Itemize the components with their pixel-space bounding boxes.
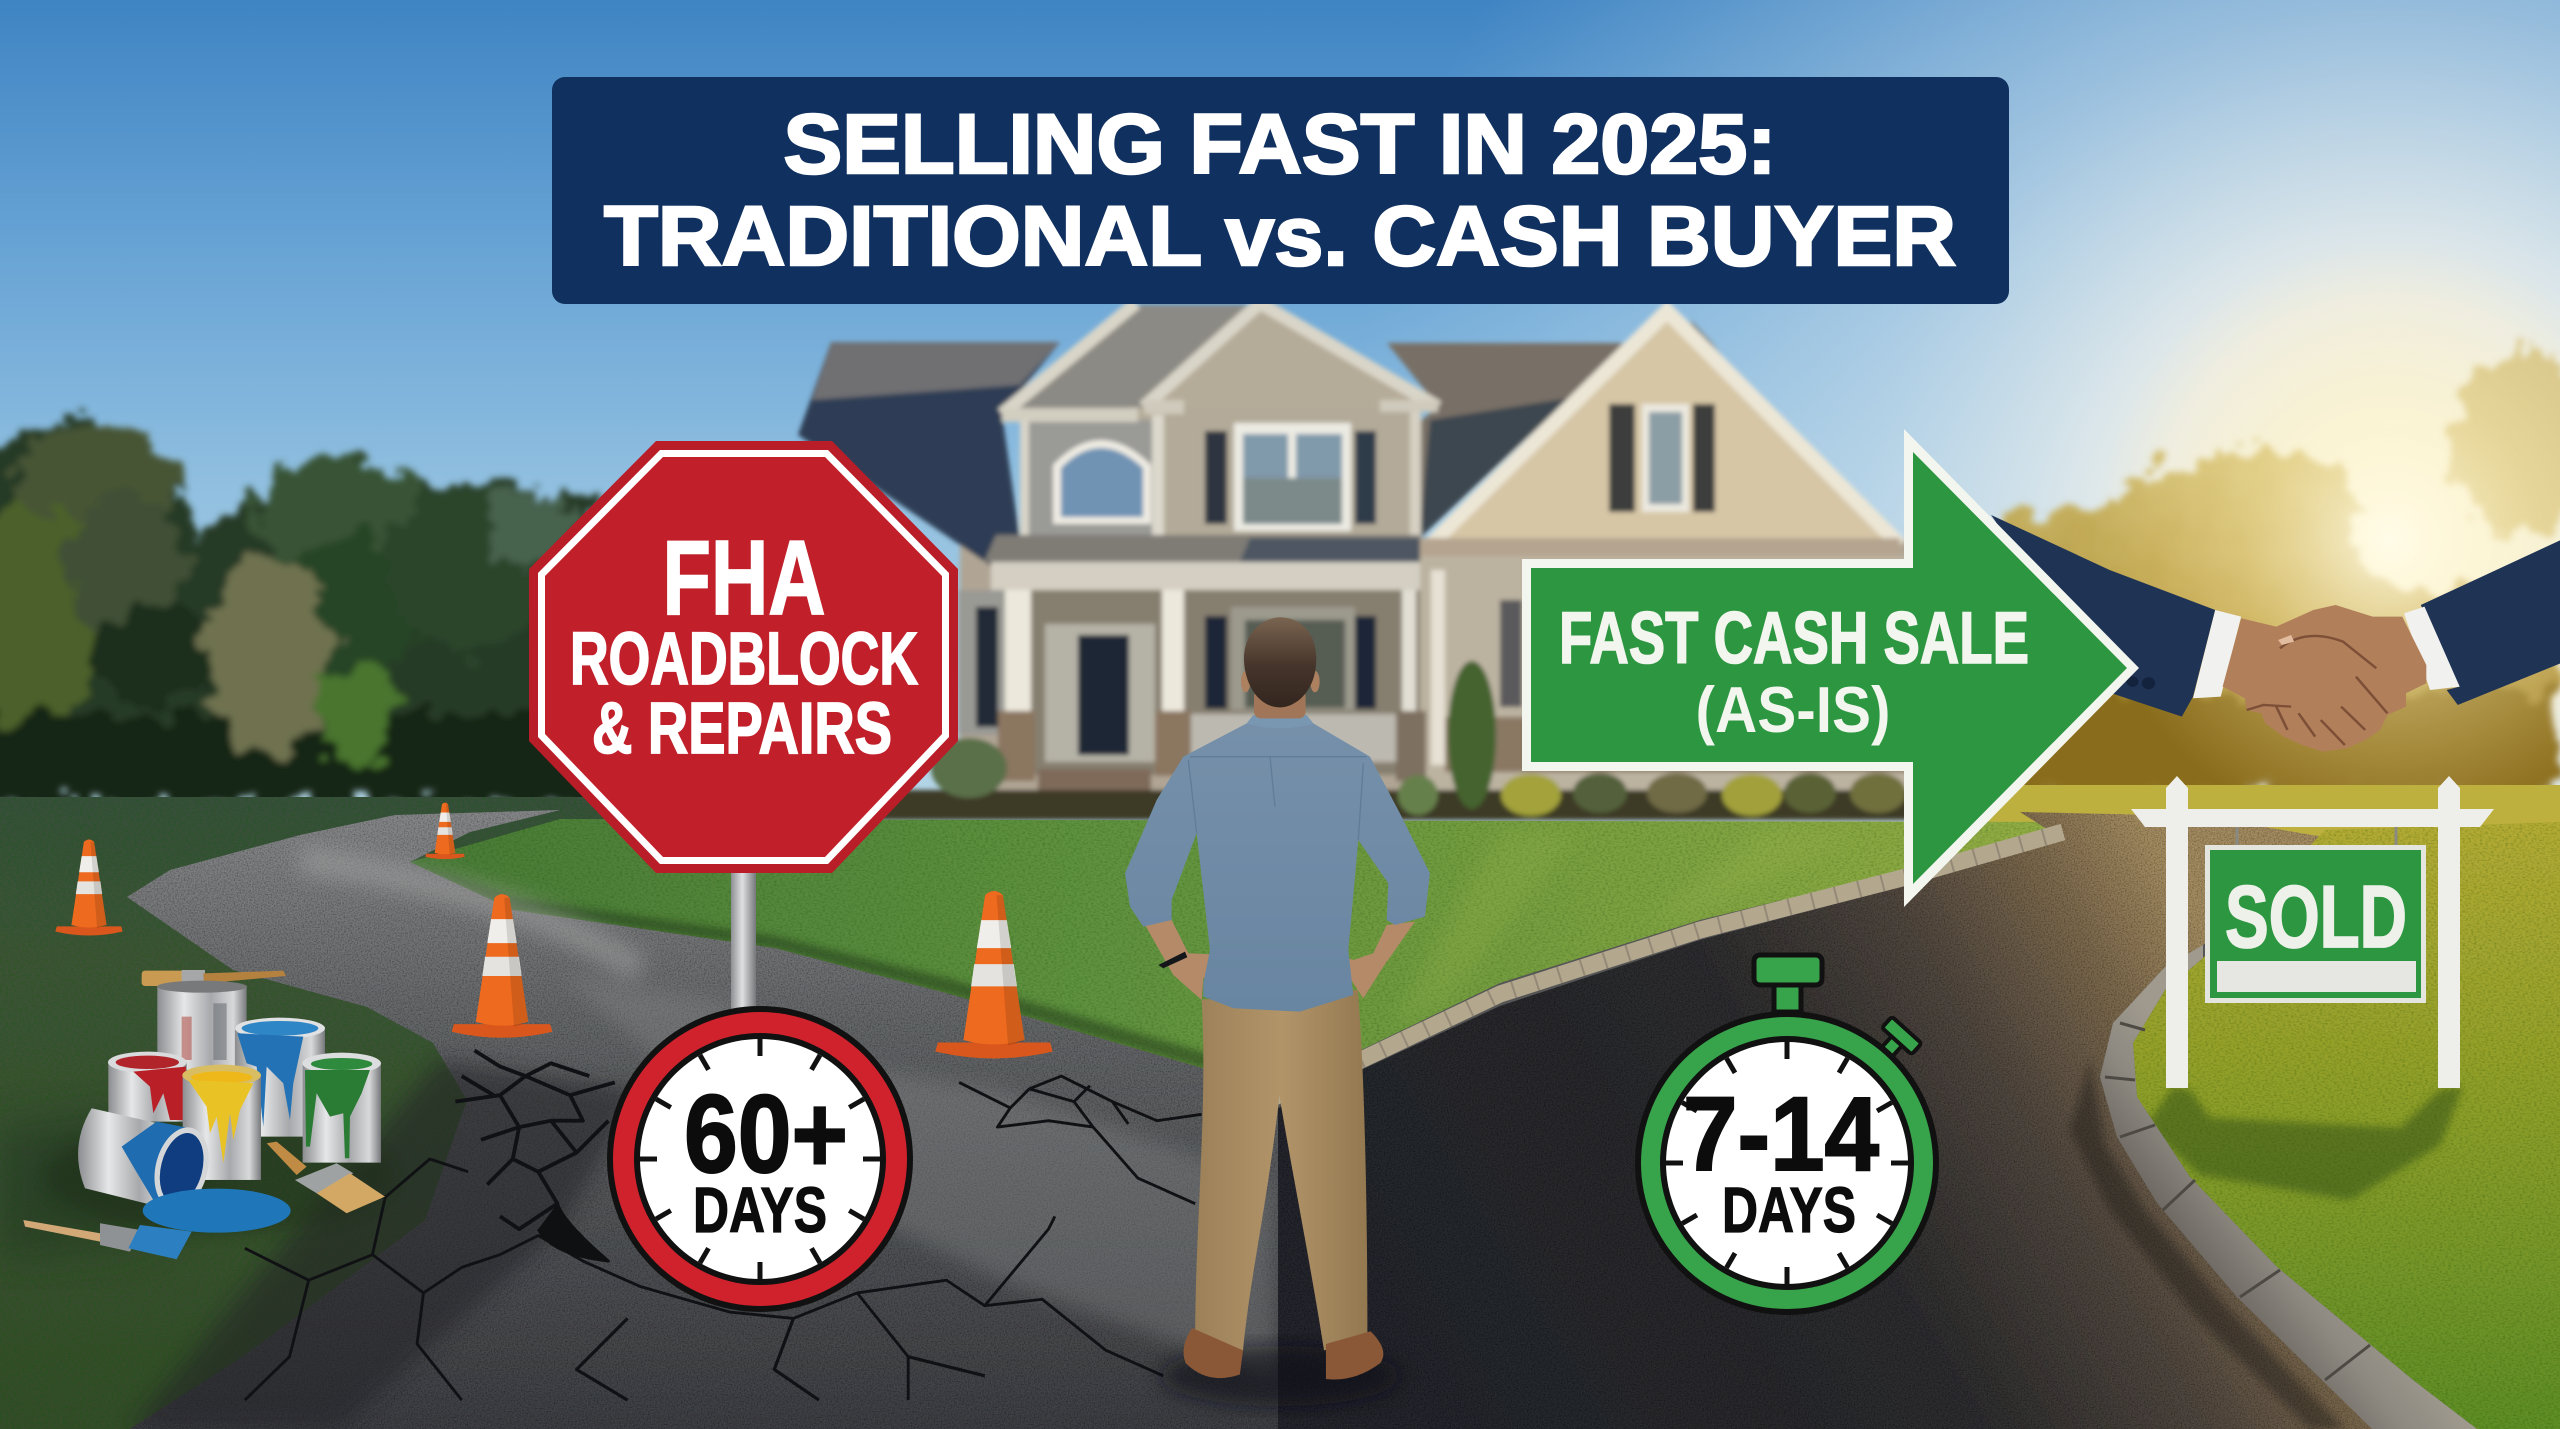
shirt bbox=[1125, 723, 1430, 1012]
sign board bbox=[2205, 845, 2426, 1003]
cone near man bbox=[935, 891, 1053, 1058]
background: lawn left bbox=[0, 797, 700, 1429]
clasped hands bbox=[2223, 605, 2426, 752]
blue can bbox=[235, 1018, 325, 1137]
silver can bbox=[157, 981, 247, 1070]
paint cans and brushes bbox=[23, 970, 393, 1259]
title banner: TRADITIONAL vs. CASH BUYER bbox=[604, 189, 1956, 283]
green arrow: fast cash sale: FAST CASH SALE bbox=[1559, 598, 2029, 679]
central lawn bbox=[410, 819, 2070, 1090]
sign text bbox=[570, 519, 918, 769]
right sleeve bbox=[2421, 540, 2560, 705]
timer: 60+ days: 60+ bbox=[684, 1073, 848, 1196]
head bbox=[1241, 617, 1320, 718]
cone far left bbox=[55, 839, 123, 936]
brush on can bbox=[142, 970, 286, 986]
left sleeve bbox=[1991, 515, 2215, 717]
SOLD sign bbox=[2131, 776, 2494, 1088]
timer: 7-14 days stopwatch: DAYS bbox=[1722, 1174, 1856, 1246]
background: trees left bbox=[0, 415, 620, 805]
man seen from behind bbox=[1125, 617, 1430, 1406]
timer: 60+ days: DAYS bbox=[693, 1174, 827, 1246]
cone near sign bbox=[452, 894, 552, 1038]
lawn right of driveway bbox=[2133, 822, 2560, 1429]
title banner bbox=[552, 77, 2009, 304]
green can bbox=[302, 1053, 381, 1163]
SOLD sign: SOLD bbox=[2225, 867, 2407, 966]
forearms and hands bbox=[1145, 920, 1415, 1000]
yellow can bbox=[182, 1065, 261, 1180]
road cracks bbox=[245, 1051, 1202, 1400]
torso, arms and head bbox=[1125, 617, 1430, 1012]
title banner: SELLING FAST IN 2025: bbox=[784, 97, 1776, 191]
sign text: & REPAIRS bbox=[592, 689, 892, 769]
sign posts bbox=[2131, 776, 2494, 1088]
octagon bbox=[529, 441, 958, 873]
cone distant bbox=[425, 803, 465, 859]
sign text: ROADBLOCK bbox=[570, 617, 918, 700]
timer: 60+ days bbox=[607, 1006, 913, 1312]
green arrow: fast cash sale: (AS-IS) bbox=[1696, 673, 1890, 746]
stone curb: right bbox=[2100, 945, 2477, 1429]
background: golden trees right bbox=[1950, 240, 2560, 800]
crown bbox=[1754, 955, 1822, 1012]
stop sign: FHA roadblock & repairs bbox=[529, 441, 958, 1010]
hanging chains bbox=[2237, 827, 2396, 846]
sign pole bbox=[731, 870, 756, 1010]
background: far lawn band right bbox=[1950, 785, 2560, 845]
fallen blue can bbox=[78, 1108, 217, 1215]
stone curb: center bbox=[1272, 832, 2063, 1098]
cuffs bbox=[2193, 610, 2241, 698]
brush blue bbox=[23, 1220, 192, 1259]
sign text: FHA bbox=[662, 519, 826, 637]
side button bbox=[1870, 1017, 1922, 1067]
trousers and shoes bbox=[1184, 990, 1383, 1379]
timer: 7-14 days stopwatch: 7-14 bbox=[1683, 1076, 1879, 1193]
cracked driveway: traditional path bbox=[127, 810, 1283, 1429]
blue lid bbox=[143, 1189, 291, 1233]
timer: 7-14 days stopwatch bbox=[1635, 955, 1939, 1315]
background: sky bbox=[0, 0, 2560, 900]
smooth driveway: cash buyer path bbox=[1278, 812, 2372, 1429]
red can bbox=[108, 1052, 187, 1122]
green arrow: fast cash sale bbox=[1522, 429, 2139, 907]
handshake with suit sleeves bbox=[1991, 515, 2560, 752]
brush right bbox=[267, 1142, 385, 1213]
background: house bbox=[798, 303, 1915, 820]
